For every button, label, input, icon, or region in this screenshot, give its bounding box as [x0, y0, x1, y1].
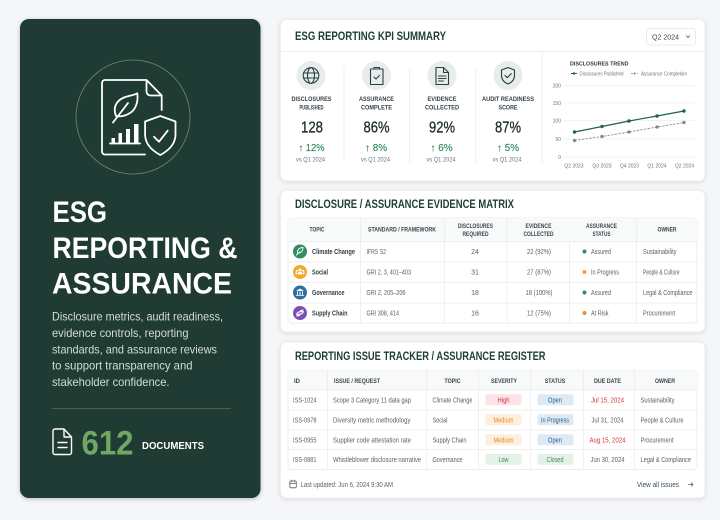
KPI: assurance complete: COMPLETE — [361, 106, 392, 112]
chart: disclosures trend: Q3 2023 — [592, 164, 612, 170]
chart: disclosures trend: Q1 2024 — [647, 164, 667, 170]
row: ISS-0955: ISS-0955 — [293, 438, 317, 444]
row: ISS-0978: Medium — [494, 418, 514, 424]
row: ISS-0955: Procurement — [640, 438, 674, 444]
description text: evidence controls, reporting — [52, 326, 188, 340]
row: ISS-0955: Supplier code attestation rate — [333, 438, 411, 444]
row: supply chain — [293, 306, 675, 320]
row: climate change: 24 — [471, 249, 479, 256]
KPI: disclosures published: DISCLOSURES — [292, 97, 332, 103]
chart: disclosures trend: 200 — [553, 84, 561, 90]
KPI: evidence collected: ↑ 6% — [430, 143, 453, 154]
chart: disclosures trend: Q4 2023 — [620, 164, 639, 170]
table header: STATUS — [545, 379, 565, 385]
period dropdown: Q2 2024 — [652, 32, 679, 42]
table header: ID — [294, 379, 301, 385]
table header — [294, 379, 676, 385]
row: ISS-0978: Jul 31, 2024 — [592, 418, 624, 424]
heading: KPI summary: ESG REPORTING KPI SUMMARY — [295, 31, 446, 43]
description text: to support transparency and — [52, 359, 192, 373]
KPI: audit readiness score: AUDIT READINESS — [482, 97, 534, 103]
icon: document — [53, 429, 72, 454]
KPI: disclosures published: vs Q1 2024 — [296, 158, 326, 164]
last updated note — [290, 480, 393, 489]
chart legend — [571, 72, 687, 78]
KPI: audit readiness score: ↑ 5% — [497, 143, 519, 154]
KPI: evidence collected: 92% — [429, 120, 455, 136]
row: ISS-0955 — [293, 434, 674, 445]
row: ISS-0955: Medium — [494, 438, 514, 444]
chart legend: Assurance Completion — [641, 72, 687, 78]
icon: shield — [502, 68, 514, 84]
row: social: 31 — [471, 270, 479, 276]
row: ISS-0881: Closed — [546, 457, 564, 464]
chart: disclosures trend: 150 — [553, 101, 561, 107]
heading: issue tracker: REPORTING ISSUE TRACKER / ASSURANCE REGISTER — [295, 351, 546, 363]
table header: DUE DATE — [594, 379, 621, 385]
KPI: disclosures published: PUBLISHED — [300, 106, 324, 112]
row: governance: 18 — [471, 290, 479, 297]
row: ISS-0978: In Progress — [541, 418, 569, 424]
row: ISS-0881 — [293, 454, 691, 465]
KPI: audit readiness score: 87% — [495, 120, 521, 136]
document count: 612 — [82, 424, 134, 462]
row: supply chain: Supply Chain — [312, 310, 348, 318]
panel: issue tracker — [280, 342, 705, 498]
row: ISS-1024: High — [498, 398, 510, 404]
KPI: assurance complete — [359, 61, 394, 164]
row: governance: Governance — [312, 290, 345, 297]
chart: disclosures trend: 50 — [555, 137, 561, 143]
row: social: GRI 2, 3, 401–403 — [366, 270, 411, 276]
row: social: People & Culture — [643, 270, 680, 276]
row: social — [293, 265, 680, 279]
chart: disclosures trend: 100 — [553, 118, 561, 124]
title: ESG — [52, 196, 107, 229]
icon: clipboard — [370, 68, 383, 84]
table header: OWNER — [655, 379, 676, 385]
icon: globe — [303, 68, 319, 83]
KPI: assurance complete: vs Q1 2024 — [361, 158, 391, 164]
row: ISS-0978: People & Culture — [640, 418, 684, 424]
row: ISS-0881: Jun 30, 2024 — [590, 457, 625, 464]
row: ISS-0881: Governance — [432, 457, 463, 464]
table header — [310, 224, 677, 238]
row: ISS-0955: Aug 15, 2024 — [590, 438, 626, 444]
series: disclosures published — [573, 109, 686, 134]
KPI: evidence collected — [425, 61, 460, 164]
row: supply chain: At Risk — [591, 310, 609, 318]
chart: disclosures trend: DISCLOSURES TREND — [570, 62, 629, 68]
row: supply chain: 12 (75%) — [527, 310, 551, 318]
row: ISS-1024: Jul 15, 2024 — [591, 398, 624, 404]
table header: TOPIC — [444, 379, 461, 385]
table header: EVIDENCE — [526, 224, 552, 230]
title — [52, 196, 238, 300]
row: ISS-1024: Scope 3 Category 11 data gap — [333, 398, 411, 404]
row: governance: 18 (100%) — [526, 290, 552, 297]
row: governance — [293, 286, 693, 300]
row: ISS-0881: Low — [498, 457, 509, 464]
description text: standards, and assurance reviews — [52, 342, 217, 356]
table header: ASSURANCE — [586, 224, 617, 230]
chart: disclosures trend: Q2 2023 — [564, 164, 584, 170]
row: ISS-1024: Climate Change — [432, 398, 473, 404]
row: governance: Assured — [591, 290, 611, 297]
table header: ISSUE / REQUEST — [334, 379, 380, 385]
KPI: audit readiness score — [482, 61, 534, 164]
row: ISS-0881: ISS-0881 — [293, 457, 317, 464]
panel: left hero — [20, 19, 260, 498]
row: ISS-1024: Sustainability — [640, 398, 675, 404]
row: ISS-0955: Open — [548, 438, 562, 444]
row: ISS-0881: Whistleblower disclosure narrative — [333, 457, 421, 464]
row: ISS-1024: ISS-1024 — [293, 398, 317, 404]
KPI: disclosures published: 128 — [301, 120, 323, 136]
description text: stakeholder confidence. — [52, 375, 170, 389]
table: evidence matrix — [288, 218, 697, 323]
row: supply chain: 16 — [471, 310, 479, 318]
row: ISS-0978: Diversity metric methodology — [333, 418, 411, 424]
KPI: audit readiness score: SCORE — [498, 106, 518, 112]
document count: DOCUMENTS — [142, 440, 204, 452]
row: supply chain: GRI 308, 414 — [366, 310, 399, 318]
panel: KPI summary — [280, 20, 705, 181]
table header: STANDARD / FRAMEWORK — [368, 228, 437, 234]
row: ISS-0978: Social — [432, 418, 448, 424]
chart: disclosures trend: 0 — [558, 155, 561, 161]
row: climate change: Sustainability — [643, 249, 677, 256]
KPI: evidence collected: vs Q1 2024 — [426, 158, 456, 164]
KPI: evidence collected: EVIDENCE — [428, 97, 456, 103]
KPI: disclosures published: ↑ 12% — [298, 143, 325, 154]
KPI: audit readiness score: vs Q1 2024 — [492, 158, 522, 164]
KPI: assurance complete: ↑ 8% — [365, 143, 387, 154]
row: governance: GRI 2, 205–206 — [366, 290, 406, 297]
row: climate change: IFRS S2 — [366, 249, 386, 256]
table: issue register — [288, 370, 697, 470]
table header: COLLECTED — [524, 232, 554, 238]
heading: evidence matrix: DISCLOSURE / ASSURANCE EVIDENCE MATRIX — [295, 199, 514, 211]
chart: disclosures trend: Q2 2024 — [675, 164, 694, 170]
description text: Disclosure metrics, audit readiness, — [52, 310, 223, 324]
period dropdown — [646, 28, 696, 45]
icon: report with leaf, bars and shield — [76, 60, 190, 174]
row: ISS-0881: Legal & Compliance — [640, 457, 691, 464]
row: supply chain: Procurement — [643, 310, 675, 318]
view all issues link: View all issues — [637, 480, 679, 489]
icon: document — [436, 68, 448, 84]
row: climate change: Climate Change — [312, 249, 355, 256]
row: ISS-1024: Open — [548, 398, 562, 404]
icon: calendar — [290, 480, 296, 488]
row: climate change: 22 (92%) — [527, 249, 551, 256]
row: ISS-0955: Supply Chain — [432, 438, 467, 444]
series: assurance completion — [573, 121, 686, 142]
chart: disclosures trend — [553, 62, 695, 170]
title: REPORTING & — [52, 232, 238, 265]
row: climate change: Assured — [591, 249, 611, 256]
arrow — [688, 482, 693, 486]
row: ISS-0978: ISS-0978 — [293, 418, 317, 424]
table header: REQUIRED — [462, 232, 489, 238]
table header: TOPIC — [310, 228, 325, 234]
last updated note: Last updated: Jun 6, 2024 9:30 AM — [300, 482, 393, 489]
document count — [53, 424, 204, 462]
KPI: assurance complete: 86% — [364, 120, 390, 136]
description text — [52, 310, 223, 389]
row: social: 27 (87%) — [527, 270, 551, 276]
row: social: Social — [312, 270, 328, 276]
table header: SEVERITY — [491, 379, 517, 385]
chart legend: Disclosures Published — [580, 72, 624, 78]
table header: STATUS — [592, 232, 610, 238]
title: ASSURANCE — [52, 268, 232, 300]
panel: evidence matrix — [280, 190, 705, 332]
row: ISS-0978 — [293, 414, 684, 425]
table header: OWNER — [658, 228, 677, 234]
row: climate change — [293, 244, 677, 258]
KPI: assurance complete: ASSURANCE — [359, 97, 394, 103]
KPI: disclosures published — [292, 61, 332, 164]
KPI: evidence collected: COLLECTED — [425, 106, 460, 112]
row: social: In Progress — [591, 270, 619, 276]
row: ISS-1024 — [293, 394, 675, 405]
table header: DISCLOSURES — [458, 224, 493, 230]
row: governance: Legal & Compliance — [643, 290, 693, 297]
